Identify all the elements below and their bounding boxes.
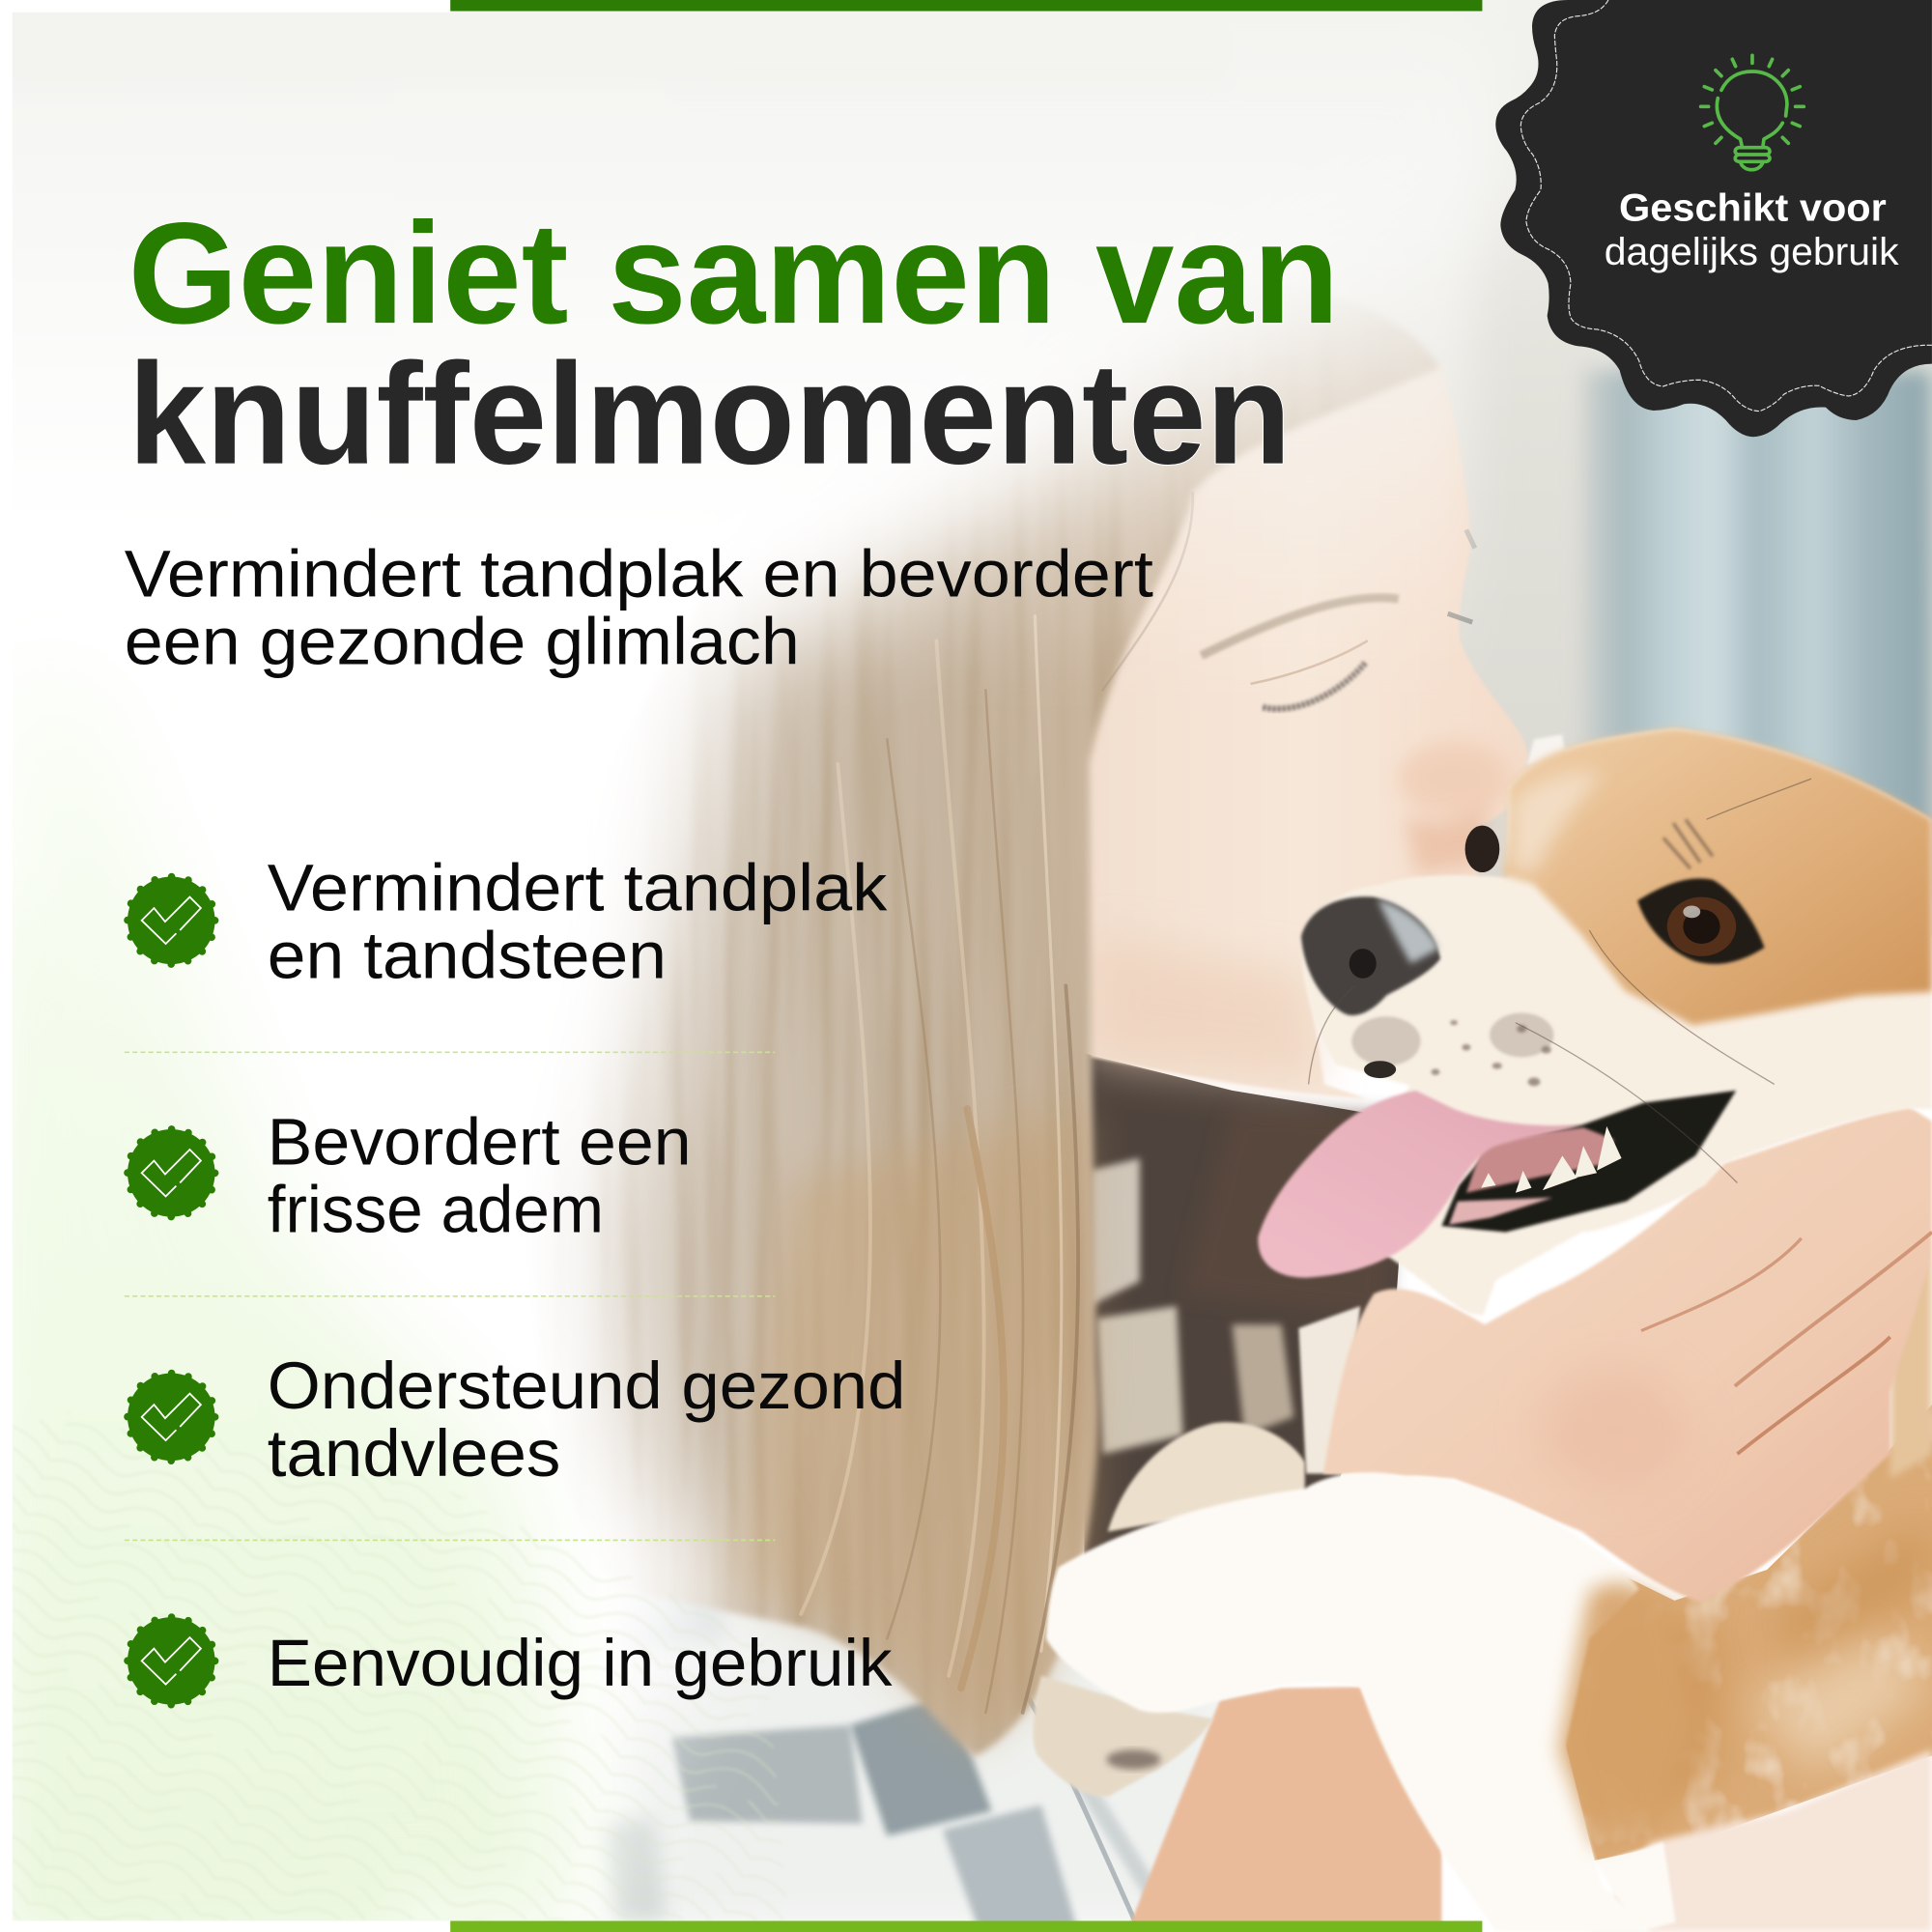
white fade over the left of the photo [0,0,1528,1932]
benefit text: en tandsteen [268,919,667,993]
woman's face [1084,363,1528,1099]
subtitle: een gezonde glimlach [125,604,800,678]
title line 2: knuffelmomenten [128,333,1292,495]
dog upper paw [1108,1422,1305,1531]
icon: light bulb [1701,55,1804,170]
badge text: Geschikt voor [1619,186,1887,229]
callout badge: daily use [1495,0,1932,437]
orange fur mask [1502,728,1932,1025]
gums [1466,1127,1614,1193]
pale wash over forehead and upper hair [690,0,1472,690]
brow mark [1663,819,1713,868]
benefit text [268,1349,906,1491]
icon: check badge [128,1617,215,1705]
benefit text: Ondersteund gezond [268,1349,905,1423]
benefit 1 [128,851,888,993]
wave pattern lower left [13,1417,788,1919]
white fur base [1301,728,1932,1315]
dog white leg [1046,1472,1651,1932]
benefit text: Vermindert tandplak [268,851,888,925]
lower hair warm tone [727,1109,1094,1749]
benefit 3 [128,1349,905,1491]
icon: check badge [128,877,215,964]
far eye [1465,826,1499,872]
benefit text: Eenvoudig in gebruik [268,1626,893,1700]
benefit text: frisse adem [268,1173,604,1247]
eyebrow [1202,598,1399,656]
hair strands [801,493,1193,1713]
benefit text [268,1104,692,1247]
window blinds [1583,370,1932,899]
nose shading [1399,742,1509,815]
dog body fur [1551,1257,1932,1861]
hair [526,277,1439,1756]
benefit text [268,851,888,993]
callout badge: daily use: dagelijks gebruik [1605,231,1899,273]
dog head [1258,728,1932,1315]
jaw shading [1091,936,1324,1084]
title [128,192,1339,495]
mouth interior [1441,1091,1736,1233]
subtitle: Vermindert tandplak en bevordert [125,536,1153,611]
top green bar [450,0,1482,11]
dog nose [1301,896,1440,1015]
orange leg patch [1559,1583,1694,1848]
woman's hand [1323,1106,1932,1602]
dog paw underside [1033,1676,1213,1797]
muzzle speckles [1351,1012,1553,1086]
icon: check badge [128,1129,215,1217]
whiskers [1309,779,1811,1182]
green tint lower left [13,666,579,1932]
teeth [1481,1126,1622,1193]
dark collar [1084,1054,1410,1602]
benefit text: tandvlees [268,1416,560,1491]
woman's arm [1127,1687,1441,1932]
closed eye lashes [1263,663,1365,709]
subtitle [125,536,1153,678]
icon: check badge [128,1374,215,1461]
left and edge white strips [0,0,13,1932]
benefit text: Bevordert een [268,1104,692,1179]
far eye [1448,613,1472,622]
room background [1109,0,1932,936]
shirt [604,1454,1233,1932]
near eye [1637,878,1765,964]
benefit 2 [128,1104,692,1247]
title line 1: Geniet samen van [128,192,1339,354]
pale forehead stripe [1511,772,1602,875]
photo: woman kissing corgi [526,0,1932,1932]
tongue [1258,1091,1582,1278]
belly skin [1589,1749,1932,1932]
benefit 4 [128,1617,893,1705]
scalloped badge shape [1495,0,1932,437]
white fur tuft [1526,734,1565,766]
bottom green bar [450,1921,1482,1932]
